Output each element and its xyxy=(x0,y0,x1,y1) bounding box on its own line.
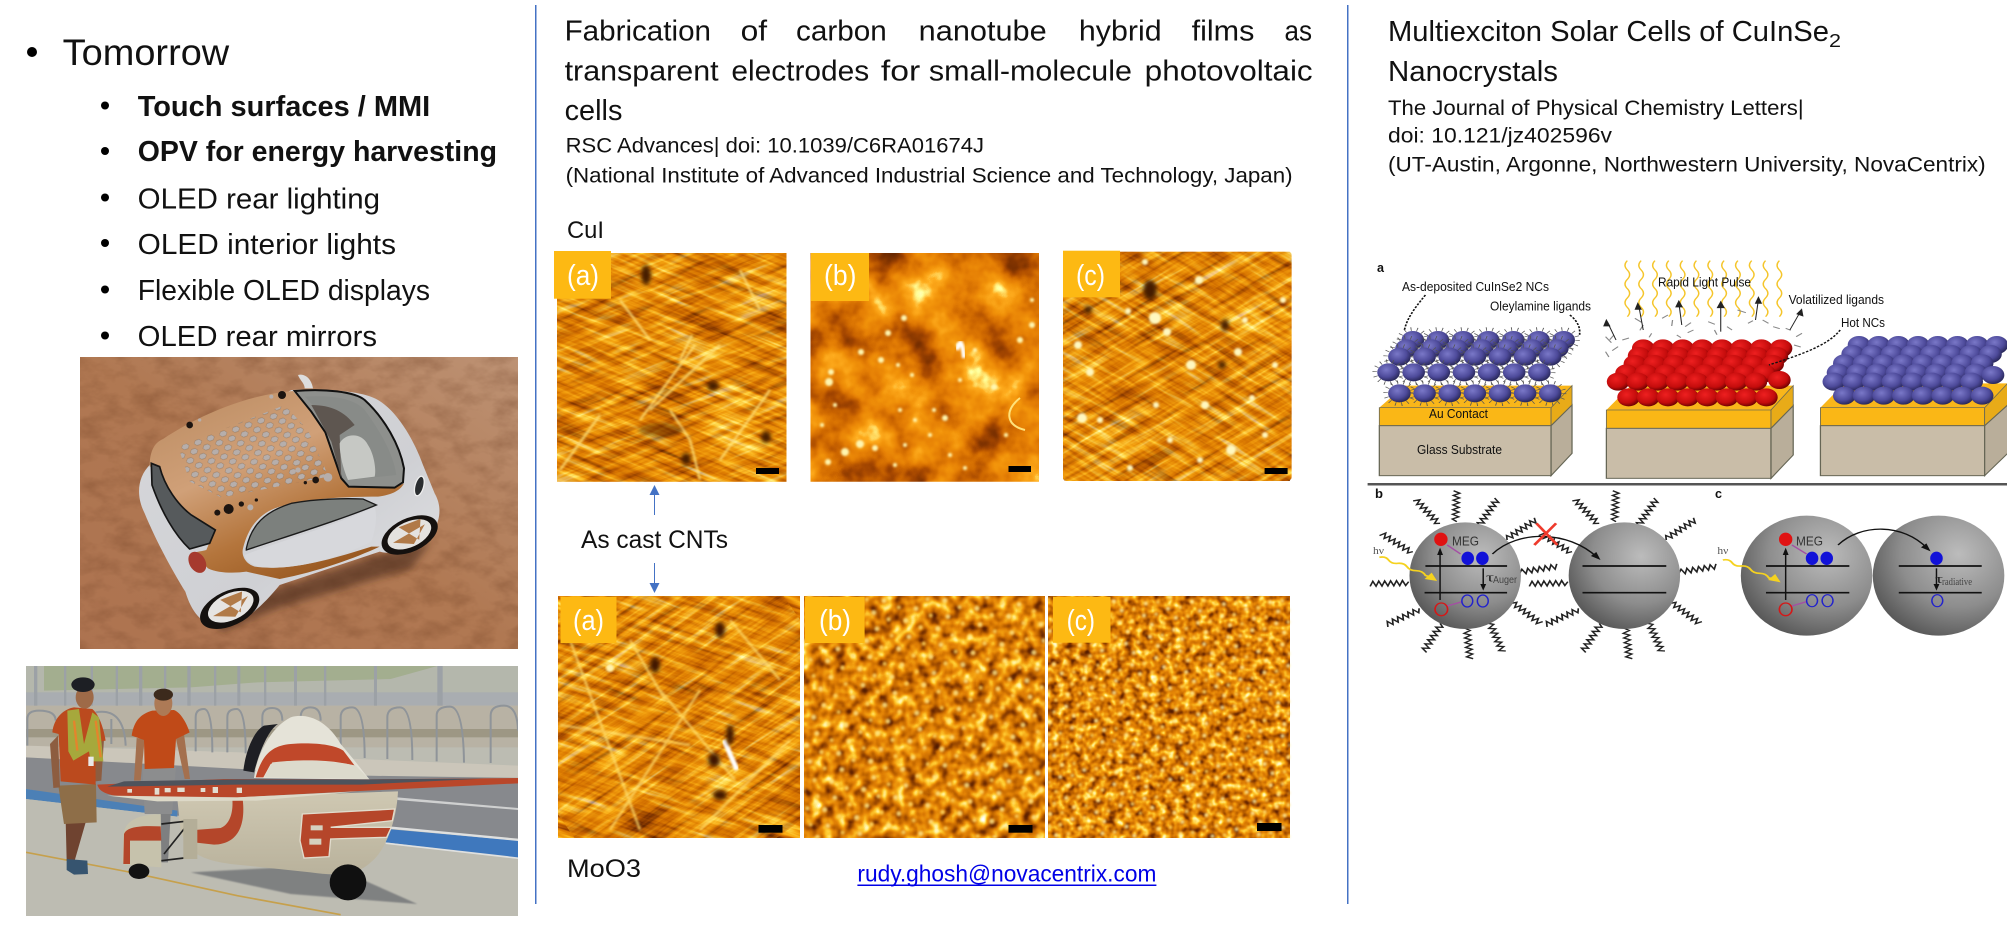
article title: hybrid xyxy=(1079,16,1162,48)
label tile (a): (a) xyxy=(567,260,599,292)
bullet list of applications: OLED rear lighting xyxy=(138,184,380,216)
schematic b: ligand-capped nanocrystals with blocked transfer xyxy=(1369,486,1718,660)
schematic b labels: MEG xyxy=(1452,535,1479,549)
left student xyxy=(50,677,106,875)
citation xyxy=(566,135,1293,188)
divider between schematics xyxy=(1368,483,2007,486)
AFM image: CuI (b) xyxy=(810,253,1039,482)
schematic b labels: hν xyxy=(1373,545,1384,557)
citation: doi: 10.121/jz402596v xyxy=(1388,125,1613,148)
article title: transparent xyxy=(565,55,719,87)
schematic a labels xyxy=(1377,260,1885,457)
AFM image: MoO3 (a) xyxy=(558,596,800,838)
article title: electrodes xyxy=(731,55,869,87)
label tile (c): (c) xyxy=(1076,260,1105,292)
article title: as xyxy=(1284,16,1312,48)
schematic a labels: a xyxy=(1377,260,1385,275)
schematic a labels: Rapid Light Pulse xyxy=(1658,276,1751,290)
bullet list of applications: Flexible OLED displays xyxy=(138,275,430,307)
label: MoO3: MoO3 xyxy=(567,855,641,883)
article title xyxy=(1388,16,1841,88)
schematic b labels xyxy=(1373,486,1518,586)
arrow: down to MoO3 image xyxy=(650,563,660,593)
article title: for xyxy=(881,55,921,87)
schematic a labels: Glass Substrate xyxy=(1417,443,1502,457)
schematic c: coupled nanocrystals with charge transfer xyxy=(1715,486,2004,636)
citation: (National Institute of Advanced Industrial Science and Technology, Japan) xyxy=(566,165,1293,188)
photo: concept car with perforated copper solar roof xyxy=(80,357,518,649)
citation: The Journal of Physical Chemistry Letters| xyxy=(1388,97,1804,120)
article title: Multiexciton Solar Cells of CuInSe xyxy=(1388,16,1829,48)
article title: films xyxy=(1192,16,1254,48)
schematic a labels: Au Contact xyxy=(1429,407,1489,421)
article title: of xyxy=(741,16,768,48)
schematic a labels: Volatilized ligands xyxy=(1789,293,1884,307)
citation xyxy=(1388,97,1986,177)
label: CuI: CuI xyxy=(567,217,604,244)
AFM image: MoO3 (c) xyxy=(1048,596,1290,838)
solar car xyxy=(97,716,518,900)
label tile (b): (b) xyxy=(819,605,851,637)
AFM image: MoO3 (b) xyxy=(804,596,1045,838)
right student xyxy=(132,689,190,862)
article title xyxy=(565,16,1313,127)
label tile (c) xyxy=(1053,597,1110,643)
panel: carbon nanotube hybrid films study xyxy=(554,20,1312,886)
heading: Tomorrow: Tomorrow xyxy=(63,32,229,73)
bullet list of applications: Touch surfaces / MMI xyxy=(138,91,430,123)
label tile (c) xyxy=(1063,251,1120,297)
article title: Nanocrystals xyxy=(1388,56,1558,88)
label tile (c): (c) xyxy=(1067,605,1095,637)
label: As cast CNTs: As cast CNTs xyxy=(581,526,728,554)
device stack 3 with sintered nanocrystals xyxy=(1820,336,2007,476)
schematic c labels: τ xyxy=(1935,571,1943,586)
divider: right column rule xyxy=(1347,5,1348,904)
schematic a labels: As-deposited CuInSe2 NCs xyxy=(1402,280,1549,294)
schematic c labels: MEG xyxy=(1796,535,1823,549)
schematic a: nanocrystal film sintering xyxy=(1375,260,2007,478)
label tile (a) xyxy=(560,597,616,643)
schematic c labels: radiative xyxy=(1942,577,1972,588)
article title: Fabrication xyxy=(565,16,711,48)
device stack 2 with red hot nanocrystals under light pulse xyxy=(1604,261,1803,478)
citation: RSC Advances| doi: 10.1039/C6RA01674J xyxy=(566,135,984,158)
schematic c labels: c xyxy=(1715,486,1722,501)
device stack 1 with ligand-capped nanocrystals xyxy=(1375,329,1577,476)
schematic a labels: Oleylamine ligands xyxy=(1490,300,1591,314)
arrow: up to CuI image xyxy=(650,485,660,515)
bullet list of applications: OLED rear mirrors xyxy=(138,321,377,353)
schematic c labels xyxy=(1715,486,1972,588)
article title: carbon xyxy=(796,16,887,48)
schematic b labels: Auger xyxy=(1493,575,1518,586)
schematic a labels: Hot NCs xyxy=(1841,316,1885,330)
contact email link: rudy.ghosh@novacentrix.com xyxy=(857,861,1156,887)
article title: photovoltaic xyxy=(1145,55,1313,87)
AFM image: CuI (c) xyxy=(1063,250,1292,481)
label tile (b) xyxy=(805,597,865,643)
article title: 2 xyxy=(1829,31,1841,51)
label tile (a) xyxy=(554,251,611,299)
label tile (b): (b) xyxy=(824,260,856,292)
article title: cells xyxy=(565,95,622,127)
panel: tomorrow applications xyxy=(26,32,518,916)
AFM image: CuI (a) xyxy=(554,251,786,482)
schematic b labels: τ xyxy=(1486,570,1494,585)
bullet list of applications: OLED interior lights xyxy=(138,229,396,261)
panel: multiexciton solar cells study xyxy=(1368,16,2007,660)
bullet list of applications xyxy=(101,91,497,353)
label tile (b) xyxy=(811,253,869,301)
photo: students with solar race car xyxy=(26,666,518,916)
citation: (UT-Austin, Argonne, Northwestern University, NovaCentrix) xyxy=(1388,154,1986,177)
article title: nanotube xyxy=(919,16,1047,48)
divider: left column rule xyxy=(535,5,536,904)
bullet list of applications: OPV for energy harvesting xyxy=(138,136,497,168)
label tile (a): (a) xyxy=(573,605,604,637)
article title: small-molecule xyxy=(929,55,1132,87)
schematic c labels: hν xyxy=(1717,545,1728,557)
schematic b labels: b xyxy=(1375,486,1383,501)
